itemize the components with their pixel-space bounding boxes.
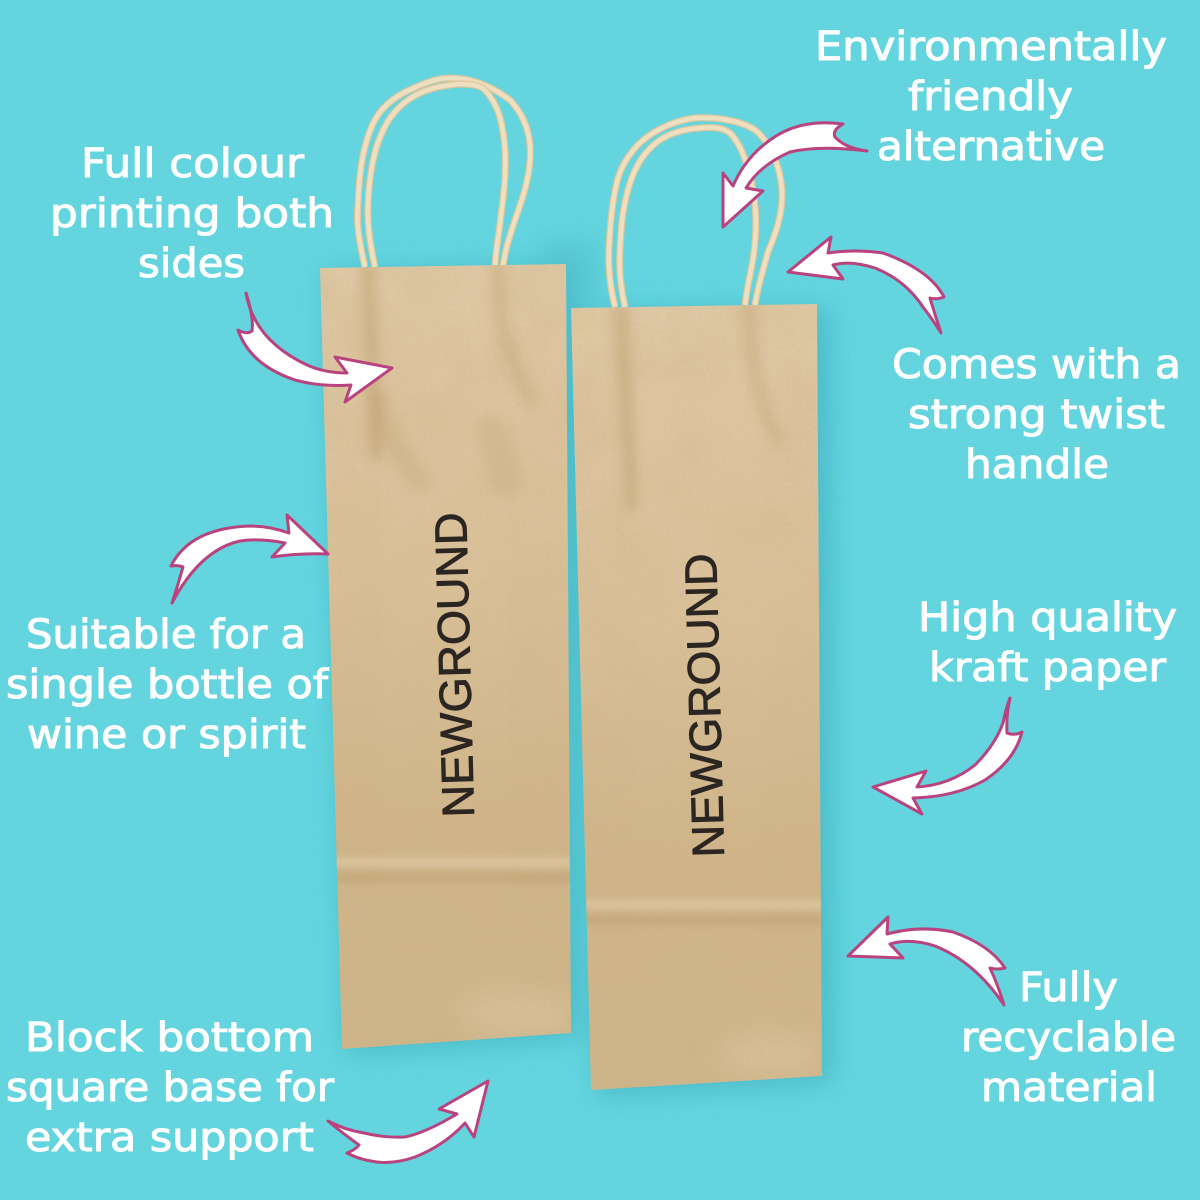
label: suitable for bottle: single bottle of — [6, 662, 329, 708]
label: full colour printing — [50, 141, 334, 287]
label: full colour printing: sides — [138, 241, 245, 287]
label: recyclable material: recyclable — [961, 1015, 1176, 1061]
label: twist handle: Comes with a — [892, 342, 1181, 388]
arrow: full colour printing — [238, 293, 392, 402]
label: environmentally friendly: alternative — [877, 124, 1105, 170]
label: twist handle: strong twist — [908, 392, 1165, 438]
label: recyclable material: material — [981, 1065, 1157, 1111]
label: recyclable material — [961, 965, 1176, 1111]
label: full colour printing: Full colour — [81, 141, 305, 187]
label: block bottom: Block bottom — [25, 1015, 314, 1061]
label: recyclable material: Fully — [1019, 965, 1118, 1011]
bag: right — [571, 118, 825, 1094]
bag shadows — [326, 240, 832, 1096]
right bag body — [571, 304, 822, 1090]
arrow: environmentally friendly — [723, 123, 867, 227]
left bag creases and base fold — [320, 264, 580, 1054]
label: kraft paper: High quality — [918, 595, 1177, 641]
arrow: suitable for bottle — [171, 515, 328, 603]
bag: left — [320, 78, 580, 1054]
arrow: block bottom — [328, 1081, 488, 1162]
label: full colour printing: printing both — [50, 191, 334, 237]
label: suitable for bottle: Suitable for a — [26, 612, 306, 658]
arrow: recyclable material — [848, 917, 1005, 1005]
label: kraft paper — [918, 595, 1177, 691]
right bag logo: NEWGROUND — [675, 553, 734, 858]
arrow: twist handle — [788, 237, 944, 333]
arrow: kraft paper — [873, 698, 1022, 814]
label: environmentally friendly: Environmentally — [815, 24, 1167, 70]
label: block bottom: extra support — [25, 1115, 314, 1161]
label: twist handle: handle — [965, 442, 1109, 488]
label: suitable for bottle: wine or spirit — [27, 712, 306, 758]
label: twist handle — [892, 342, 1181, 488]
left bag body — [320, 264, 571, 1049]
label: suitable for bottle — [6, 612, 329, 758]
label: environmentally friendly — [815, 24, 1167, 170]
label: block bottom — [6, 1015, 335, 1161]
right bag creases and base fold — [571, 304, 825, 1094]
right bag handle — [609, 118, 782, 307]
left bag handle — [357, 78, 530, 267]
label: kraft paper: kraft paper — [929, 645, 1167, 691]
label: environmentally friendly: friendly — [908, 74, 1073, 120]
label: block bottom: square base for — [6, 1065, 335, 1111]
left bag logo: NEWGROUND — [425, 512, 484, 818]
